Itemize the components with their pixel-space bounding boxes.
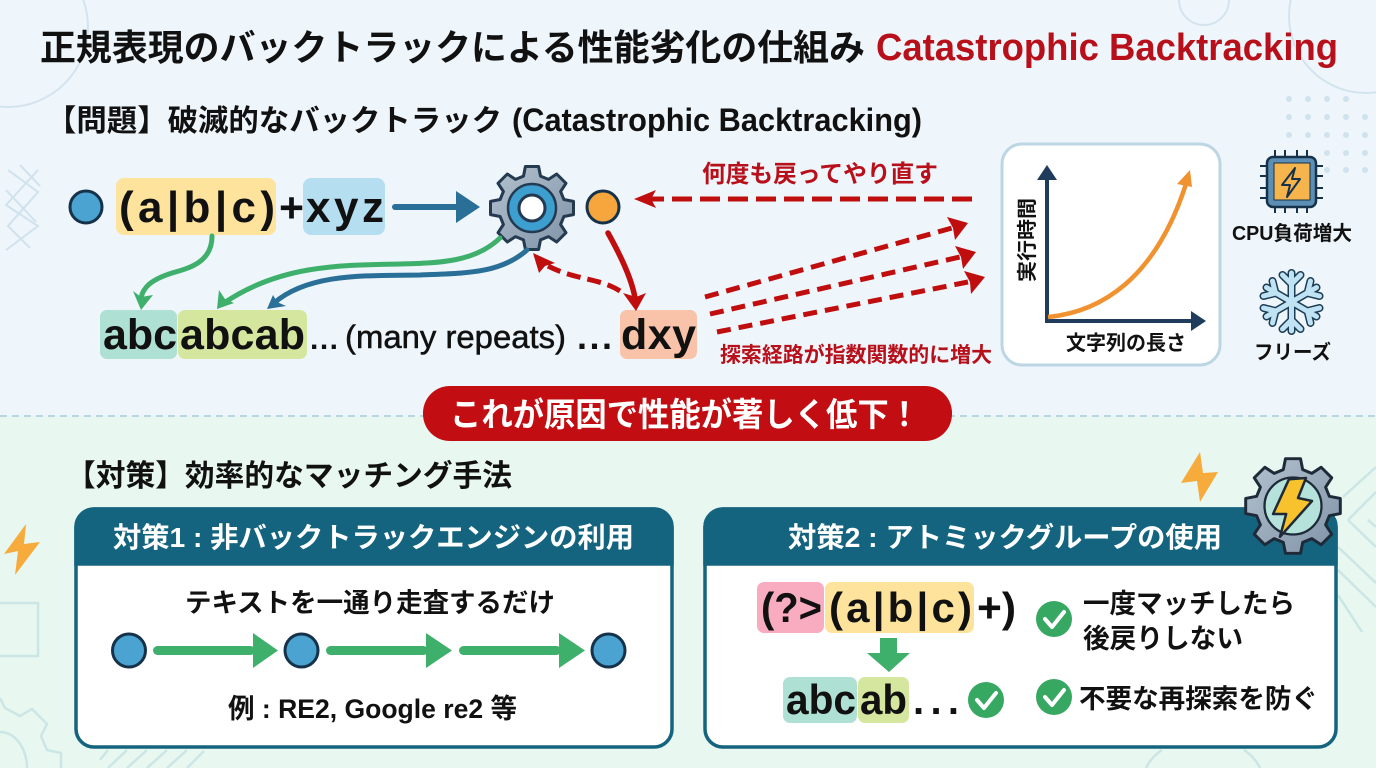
heading: problem (46, 102, 922, 138)
arrow: regex to engine (395, 191, 480, 223)
panel 1 title: 対策1 : 非バックトラックエンジンの利用 (113, 522, 634, 553)
matched string: ab (860, 676, 907, 723)
heading: problem: (Catastrophic Backtracking) (512, 102, 922, 138)
string row: abc (103, 311, 177, 359)
point 1 text (1083, 589, 1295, 654)
atomic group regex: (a|b|c) (829, 584, 972, 632)
point 2 text: 不要な再探索を防ぐ (1079, 684, 1318, 714)
arrow: retry (634, 190, 972, 208)
atomic group regex: (?> (761, 584, 822, 631)
example text: 例 : RE2, Google re2 等 (228, 694, 517, 724)
matched string: abc (786, 676, 856, 723)
arrow: dashed return to engine (533, 253, 620, 291)
atomic group regex: +) (977, 584, 1016, 631)
arrow: solid red to dxy (608, 233, 646, 311)
label: CPU load: CPU負荷増大 (1232, 222, 1352, 245)
regex pattern: + (279, 184, 304, 231)
label: retry: 何度も戻ってやり直す (702, 161, 938, 188)
regex pattern (116, 178, 385, 235)
banner: performance drop (423, 386, 952, 441)
icon: check 2 (1036, 679, 1072, 715)
icon: small bolt (1181, 452, 1218, 502)
icon: snowflake (1264, 273, 1320, 331)
title: 正規表現のバックトラックによる性能劣化の仕組み (40, 27, 865, 68)
chart: execution time vs string length: 文字列の長さ (1066, 332, 1186, 355)
string row: ... (310, 323, 338, 356)
string row: dxy (621, 311, 696, 359)
panel: problem diagram (70, 161, 992, 367)
heading: countermeasures: 【対策】効率的なマッチング手法 (66, 460, 512, 493)
icon: bolt gear (1246, 459, 1340, 553)
banner: performance drop: これが原因で性能が著しく低下！ (450, 396, 920, 433)
string row: ... (577, 316, 612, 357)
string row: abcab (180, 311, 305, 359)
icon: engine gear (490, 166, 574, 250)
point 1 text: 一度マッチしたら (1083, 589, 1295, 619)
arrows: exponential paths (705, 217, 985, 332)
string row (100, 310, 697, 359)
chart: execution time vs string length: 実行時間 (1016, 198, 1039, 282)
arrow: down (867, 638, 910, 672)
linear scan diagram (112, 633, 625, 668)
chart: execution time vs string length (1002, 144, 1220, 365)
icon: CPU (1260, 150, 1323, 213)
icon: left bolt (4, 524, 40, 575)
regex pattern: (a|b|c) (119, 183, 275, 233)
regex pattern: xyz (306, 183, 384, 232)
label: freeze: フリーズ (1254, 340, 1331, 364)
scan text: テキストを一通り走査するだけ (185, 588, 555, 618)
panel: countermeasure 2 (705, 509, 1336, 747)
panel 2 title: 対策2 : アトミックグループの使用 (788, 521, 1222, 553)
current position node (587, 191, 619, 223)
point 1 text: 後戻りしない (1083, 624, 1243, 654)
matched string (783, 676, 959, 723)
label: exponential growth: 探索経路が指数関数的に増大 (720, 343, 992, 367)
heading: problem: 【問題】破滅的なバックトラック (46, 105, 502, 138)
icon: check 1 (1036, 601, 1072, 637)
title (40, 27, 1338, 69)
matched string: ... (913, 679, 959, 723)
start node (70, 191, 102, 223)
arrows: match attempts (133, 236, 527, 310)
string row: (many repeats) (345, 319, 566, 355)
icon: check small (968, 682, 1004, 718)
panel: countermeasure 1 (76, 509, 672, 747)
title: Catastrophic Backtracking (876, 27, 1338, 69)
atomic group regex (757, 582, 1016, 633)
